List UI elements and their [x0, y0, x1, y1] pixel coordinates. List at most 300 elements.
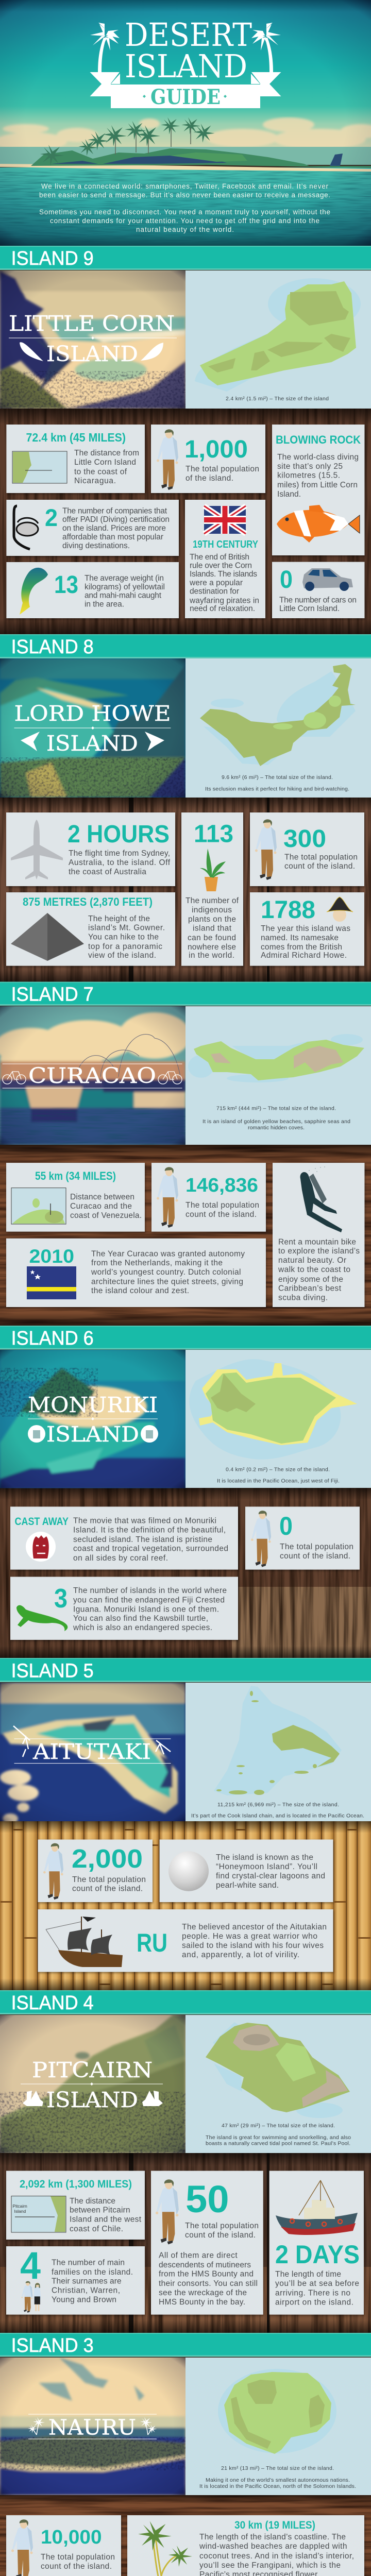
- text block: Caribbean’s best: [278, 1284, 342, 1293]
- caption: [203, 1106, 350, 1131]
- text block: The end of British: [190, 553, 249, 562]
- text block: The island is known as the: [216, 1853, 313, 1862]
- text block: The total population: [72, 1875, 146, 1884]
- card: Ru: RU: [137, 1928, 167, 1957]
- title: Monuriki Island: ISLAND: [46, 1422, 139, 1447]
- text block: [69, 849, 171, 876]
- card: Ru: [38, 1909, 333, 1972]
- text block: [72, 1875, 146, 1893]
- text block: affordable than most popular: [62, 533, 163, 541]
- mini map: Island: [14, 2209, 26, 2214]
- map: Little Corn Island: [185, 270, 371, 409]
- map: Lord Howe Island: [185, 658, 371, 798]
- text block: Island and the west: [70, 2215, 142, 2224]
- photo: Aitutaki: [0, 1683, 185, 1821]
- text block: Little Corn Island.: [279, 604, 340, 613]
- card: population 50: 50: [185, 2178, 229, 2221]
- text block: The total population: [185, 1201, 259, 1210]
- photo: Monuriki: [0, 1350, 185, 1488]
- card: population 300: [250, 812, 364, 886]
- card: 19th century: [185, 500, 265, 618]
- card: 875 metres: 875 METRES (2,870 FEET): [23, 895, 153, 908]
- icon: scuba diver: [300, 1166, 342, 1232]
- card: 1788: 1788: [261, 896, 315, 924]
- title: Monuriki Island: MONURIKI: [28, 1393, 158, 1417]
- caption: boasts a naturally carved tidal pool named St. Paul’s Pool.: [206, 2141, 350, 2147]
- icon: palm trees: [138, 2521, 192, 2576]
- text block: scuba diving.: [278, 1293, 328, 1302]
- icon: person: [157, 1167, 178, 1228]
- map: Curacao: [185, 1006, 371, 1145]
- title: Nauru: [28, 2414, 157, 2440]
- caption: 0.4 km² (0.2 mi²) – The size of the island.: [226, 1467, 330, 1473]
- hero panel: island photo: [0, 0, 371, 246]
- text block: arriving. There is no: [275, 2289, 350, 2298]
- icon: person: [255, 819, 277, 880]
- title: Aitutaki: [13, 1726, 171, 1764]
- text block: The number of companies that: [62, 506, 167, 515]
- text block: see the wreckage of the: [159, 2289, 247, 2297]
- card: population 300: 300: [283, 825, 326, 853]
- text block: The length of the island’s coastline. The: [199, 2533, 346, 2541]
- text block: The length of time: [275, 2270, 341, 2279]
- card: population 0: 0: [279, 1512, 293, 1540]
- card: zero cars: 0: [280, 566, 293, 594]
- card: 2010: [6, 1239, 266, 1307]
- mini map: [12, 451, 67, 483]
- text block: The Year Curacao was granted autonomy: [91, 1250, 245, 1258]
- text block: enjoy some of the: [278, 1275, 343, 1284]
- intro text: natural beauty of the world.: [136, 226, 234, 233]
- card: yellowtail weight: [6, 562, 179, 618]
- text block: [70, 1193, 142, 1220]
- caption: Making it one of the world’s smallest autonomous nations.: [206, 2477, 350, 2483]
- card: population 10,000: [6, 2515, 121, 2576]
- text block: count of the island.: [185, 1210, 257, 1219]
- text block: Distance between: [70, 1193, 134, 1201]
- title: Little Corn Island: ISLAND: [46, 342, 138, 366]
- text block: [280, 1543, 353, 1561]
- text block: [185, 896, 239, 960]
- caption: It is an island of golden yellow beaches, sapphire seas and: [203, 1118, 350, 1125]
- text block: in the area.: [85, 600, 124, 609]
- band: Island 5: [0, 1658, 371, 1682]
- icon: sailing ship: [46, 1917, 123, 1967]
- heading: DESERT: DESERT: [125, 16, 252, 54]
- mini map: [11, 1188, 66, 1224]
- band: Island 9: [0, 246, 371, 270]
- text block: [199, 2533, 354, 2576]
- icon: UK flag: [204, 506, 246, 534]
- icon: mahi-mahi: [20, 568, 48, 615]
- text block: The distance: [70, 2197, 115, 2206]
- text block: Rent a mountain bike: [278, 1238, 356, 1247]
- icon: right palm and ribbon tail: [251, 23, 281, 96]
- icon: couple: [21, 2281, 41, 2313]
- text block: Their surnames are: [52, 2277, 122, 2285]
- card: 19th century: 19TH CENTURY: [193, 539, 259, 550]
- text block: kilometres (15.5.: [277, 471, 340, 480]
- band: Island 9: ISLAND 9: [11, 248, 94, 269]
- card: PADI diving: [6, 500, 179, 556]
- text block: [52, 2259, 133, 2304]
- intro text: We live in a connected world: smartphones, Twitter, Facebook and email. It’s never: [41, 182, 328, 190]
- text block: their consorts. You can still: [159, 2279, 258, 2288]
- text block: can be found: [188, 934, 236, 942]
- text block: count of the island.: [284, 862, 355, 871]
- text block: [261, 924, 350, 960]
- text block: miles) from Little Corn: [277, 481, 358, 489]
- card: four families: [6, 2244, 145, 2315]
- band: Island 3: ISLAND 3: [11, 2335, 94, 2357]
- band: Island 6: ISLAND 6: [11, 1328, 94, 1349]
- text block: on all sides by coral reef.: [73, 1554, 168, 1563]
- text block: kilograms) of yellowtail: [85, 583, 165, 591]
- text block: and mahi-mahi caught: [85, 591, 162, 600]
- text block: [73, 1586, 227, 1632]
- band: Island 7: [0, 982, 371, 1006]
- text block: [185, 465, 259, 483]
- band: Island 3: [0, 2333, 371, 2357]
- text block: The world-class diving: [277, 453, 359, 462]
- photo: Little Corn Island: [0, 270, 185, 409]
- icon: bicycles: [3, 1072, 182, 1084]
- icon: left palm and ribbon tail: [90, 23, 120, 96]
- card: population 146,836: [151, 1163, 266, 1232]
- wood background: island 6: [0, 1488, 371, 1658]
- card: two days at sea: 2 DAYS: [275, 2240, 360, 2269]
- icon: Wilson: [26, 1532, 56, 1562]
- icon: person: [43, 1843, 63, 1900]
- icon: pyramid: [11, 913, 84, 961]
- card: population 2,000: 2,000: [72, 1844, 143, 1873]
- text block: descendents of mutineers: [159, 2261, 251, 2269]
- icon: corn leaves: [20, 342, 163, 361]
- text block: and, apparently, a lot of virility.: [182, 1951, 299, 1959]
- text block: The number of cars on: [279, 596, 357, 605]
- text block: rule over the Corn: [190, 562, 252, 570]
- caption: 715 km² (444 mi²) – The total size of the island.: [216, 1106, 336, 1112]
- text block: to the coast of: [74, 468, 127, 476]
- caption: 9.6 km² (6 mi²) – The total size of the island.: [222, 774, 333, 781]
- icon: fishing boat: [276, 2180, 358, 2235]
- text block: Admiral Richard Howe.: [261, 951, 347, 960]
- icon: person: [157, 429, 178, 490]
- title: Lord Howe Island: ISLAND: [46, 731, 138, 756]
- text block: people. He was a great warrior who: [182, 1932, 317, 1941]
- text block: [85, 574, 165, 609]
- icon: tall ships: [23, 2091, 163, 2106]
- title: Little Corn Island: [9, 311, 177, 366]
- card: population 2,000: [38, 1839, 153, 1902]
- card: population 1,000: [151, 425, 265, 493]
- text block: indigenous: [192, 906, 232, 914]
- text block: find crystal-clear lagoons and: [216, 1872, 325, 1880]
- band: Island 4: ISLAND 4: [11, 1992, 94, 2014]
- icon: person: [251, 1511, 271, 1567]
- icon: clownfish: [277, 505, 360, 543]
- text block: Islands. The islands: [190, 570, 257, 579]
- logo: Desert Island Guide: [90, 16, 281, 109]
- icon: plane: [11, 820, 63, 879]
- card: coastline: 30 km (19 MILES): [234, 2519, 315, 2531]
- text block: named. Its namesake: [261, 934, 339, 942]
- text block: The movie that was filmed on Monuriki: [73, 1517, 216, 1525]
- text block: [88, 914, 165, 960]
- text block: [279, 596, 357, 613]
- text block: in the world.: [189, 951, 234, 960]
- text block: The number of: [185, 896, 239, 905]
- photo: Nauru: [0, 2358, 185, 2495]
- text block: to explore the island’s: [278, 1247, 360, 1256]
- band: Island 4: [0, 1990, 371, 2014]
- text block: sailed to the island with his four wives: [182, 1941, 324, 1950]
- caption: [205, 774, 349, 792]
- text block: pearl-white sand.: [216, 1881, 279, 1890]
- text block: you’ll be at sea before: [275, 2279, 359, 2288]
- icon: warriors: [13, 1726, 171, 1757]
- card: coastline: [127, 2515, 364, 2576]
- text block: The total population: [185, 465, 259, 473]
- text block: were a popular: [189, 579, 243, 587]
- title: Lord Howe Island: LORD HOWE: [14, 701, 171, 726]
- text block: [185, 1201, 259, 1219]
- ribbon: GUIDE: GUIDE: [150, 85, 221, 109]
- intro text: [39, 182, 330, 233]
- title: Pitcairn Island: PITCAIRN: [32, 2058, 153, 2082]
- card: 55 km: [6, 1163, 145, 1232]
- card: population 1,000: 1,000: [184, 436, 248, 463]
- text block: [91, 1250, 245, 1295]
- text block: [275, 2270, 359, 2307]
- text block: destination for: [190, 587, 239, 596]
- text block: the island colour and zest.: [91, 1286, 189, 1295]
- card: distance to Nicaragua: [6, 425, 145, 493]
- text block: the coast of Australia: [69, 868, 146, 876]
- text block: “Honeymoon Island”. You’ll: [216, 1862, 317, 1871]
- map: Monuriki: [185, 1350, 371, 1488]
- text block: which is also an endangered species.: [73, 1623, 212, 1632]
- card: 875 metres: [6, 892, 175, 966]
- card: scuba: [273, 1163, 365, 1307]
- text block: You can also find the Kawsbill turtle,: [73, 1614, 208, 1623]
- band: Island 6: [0, 1326, 371, 1350]
- text block: diving destinations.: [62, 541, 130, 550]
- text block: The number of main: [52, 2259, 125, 2267]
- title: Pitcairn Island: [21, 2058, 163, 2112]
- text block: wayfaring pirates in: [189, 597, 259, 605]
- icon: iguana: [16, 1605, 68, 1631]
- icon: car: [302, 568, 353, 591]
- text block: top for a panoramic: [88, 942, 162, 951]
- text block: nowhere else: [188, 943, 236, 952]
- card: distance to Nicaragua: 72.4 km (45 MILES): [26, 431, 126, 444]
- caption: 11,215 km² (6,969 mi²) – The size of the island.: [217, 1802, 339, 1808]
- text block: you’ll see the Frangipani, which is the: [199, 2561, 341, 2570]
- text block: The year this island was: [261, 924, 350, 933]
- card: 55 km: 55 km (34 MILES): [35, 1170, 116, 1182]
- text block: The total population: [284, 853, 358, 862]
- text block: Curacao and the: [70, 1202, 132, 1211]
- card: zero cars: [272, 562, 365, 618]
- text block: [189, 553, 259, 613]
- caption: [206, 2123, 351, 2147]
- icon: Curacao flag: [27, 1266, 76, 1299]
- wood background: island 3: [0, 2495, 371, 2576]
- text block: Iguana. Monuriki Island is one of them.: [73, 1605, 219, 1614]
- card: population 146,836: 146,836: [185, 1175, 258, 1196]
- mini map: [11, 2196, 66, 2232]
- title: Pitcairn Island: ISLAND: [46, 2088, 138, 2112]
- text block: secluded island. The island is pristine: [73, 1535, 212, 1544]
- text block: [278, 1238, 360, 1302]
- intro text: Sometimes you need to disconnect. You need a moment truly to yourself, without the: [39, 208, 330, 216]
- text block: [62, 506, 170, 550]
- caption: It is located in the Pacific Ocean, north of the Solomon Islands.: [199, 2483, 356, 2489]
- text block: [216, 1853, 325, 1890]
- text block: HMS Bounty in the bay.: [159, 2298, 245, 2307]
- card: 2,092 km: [6, 2171, 145, 2240]
- text block: The number of islands in the world where: [73, 1586, 227, 1595]
- text block: coast of Venezuela.: [70, 1211, 142, 1220]
- wood background: island 9: [0, 409, 371, 634]
- card: 2 hours: [6, 812, 175, 886]
- map: Nauru: [185, 2358, 371, 2495]
- card: Cast Away: CAST AWAY: [14, 1516, 69, 1528]
- card: 1788: [250, 892, 364, 966]
- card: Blowing Rock: BLOWING ROCK: [276, 433, 361, 446]
- text block: The average weight (in: [85, 574, 164, 583]
- icon: person: [156, 2179, 179, 2244]
- photo: Pitcairn: [0, 2015, 185, 2153]
- intro text: been easier to send a message. But it’s also never been easier to receive a message.: [39, 191, 330, 199]
- band: Island 8: [0, 634, 371, 658]
- text block: Australia, to the island. Off: [69, 858, 171, 867]
- text block: Island. It is the definition of the beautiful,: [73, 1526, 226, 1535]
- text block: coconut trees. And in the island’s interior,: [199, 2552, 354, 2561]
- text block: need of relaxation.: [190, 604, 255, 613]
- text block: [182, 1923, 327, 1959]
- text block: Christian, Warren,: [52, 2286, 120, 2295]
- band: Island 7: ISLAND 7: [11, 984, 94, 1006]
- photo: Lord Howe Island: [0, 658, 185, 798]
- text block: You can hike to the: [88, 933, 159, 942]
- text block: [73, 1517, 228, 1563]
- text block: coast of Chile.: [70, 2225, 123, 2233]
- text block: natural beauty. Or: [278, 1256, 346, 1265]
- text block: [70, 2197, 142, 2233]
- caption: 2.4 km² (1.5 mi²) – The size of the island: [226, 396, 329, 402]
- text block: count of the island.: [41, 2562, 112, 2571]
- card: iguana: [10, 1577, 238, 1640]
- text block: view of the island.: [88, 951, 156, 960]
- mini map: Pitcairn: [12, 2204, 27, 2209]
- card: 2 hours: 2 HOURS: [68, 821, 170, 848]
- card: population 50: [151, 2171, 263, 2315]
- text block: The flight time from Sydney,: [69, 849, 170, 858]
- text block: offer PADI (Diving) certification: [62, 515, 170, 524]
- text block: site that’s only 25: [277, 462, 343, 471]
- caption: It is located in the Pacific Ocean, just west of Fiji.: [217, 1478, 340, 1484]
- text block: count of the island.: [280, 1552, 350, 1561]
- caption: [217, 1467, 340, 1484]
- card: 113 plants: [181, 812, 243, 966]
- caption: [199, 2465, 356, 2489]
- text block: island that: [193, 924, 232, 933]
- icon: snorkel: [14, 506, 38, 549]
- text block: walk to the coast to: [278, 1265, 350, 1274]
- text block: count of the island.: [72, 1885, 143, 1893]
- text block: of the island.: [185, 474, 233, 483]
- title: Nauru: NAURU: [48, 2415, 136, 2440]
- text block: world’s youngest country. Dutch colonial: [91, 1268, 241, 1277]
- text block: The total population: [280, 1543, 353, 1551]
- text block: comes from the British: [261, 943, 342, 952]
- card: Honeymoon Island: [160, 1839, 333, 1902]
- title: Curacao: CURACAO: [28, 1063, 156, 1088]
- text block: airport on the island.: [275, 2298, 353, 2307]
- icon: pearl: [168, 1851, 209, 1891]
- bamboo background: island 5: [0, 1821, 371, 1990]
- text block: Young and Brown: [52, 2296, 116, 2304]
- caption: 47 km² (29 mi²) – The total size of the island.: [222, 2123, 335, 2129]
- text block: [284, 853, 358, 871]
- card: yellowtail weight: 13: [54, 571, 78, 599]
- icon: palms: [28, 2417, 157, 2435]
- text block: you can find the endangered Fiji Crested: [73, 1596, 225, 1605]
- text block: from the HMS Bounty and: [159, 2270, 254, 2279]
- text block: The believed ancestor of the Aitutakian: [182, 1923, 327, 1931]
- text block: families on the island.: [52, 2268, 133, 2277]
- title: Little Corn Island: LITTLE CORN: [9, 311, 175, 336]
- band: Island 8: ISLAND 8: [11, 636, 94, 658]
- text block: Little Corn Island: [74, 458, 136, 467]
- wood background: island 7: [0, 1145, 371, 1326]
- text block: [74, 449, 139, 485]
- card: iguana: 3: [54, 1584, 68, 1614]
- text block: from the Netherlands, making it the: [91, 1259, 223, 1267]
- text block: [41, 2553, 115, 2571]
- text block: The total population: [41, 2553, 115, 2562]
- icon: birds: [21, 732, 164, 751]
- caption: [191, 1802, 364, 1819]
- text block: plants on the: [188, 915, 236, 924]
- text block: All of them are direct: [159, 2251, 238, 2260]
- text block: The height of the: [88, 914, 150, 923]
- text block: Nicaragua.: [74, 477, 116, 485]
- ribbon: GUIDE: [111, 84, 260, 109]
- text block: island’s Mt. Gowner.: [88, 923, 165, 932]
- card: PADI diving: 2: [45, 504, 58, 531]
- text block: [159, 2222, 259, 2307]
- card: four families: 4: [20, 2244, 41, 2287]
- title: Lord Howe Island: [14, 701, 171, 756]
- card: 2,092 km: 2,092 km (1,300 MILES): [20, 2178, 132, 2190]
- photo: Curacao: [0, 1006, 185, 1145]
- text block: The distance from: [74, 449, 139, 457]
- intro text: constant demands for your attention. You need to get off the grid and into the: [50, 217, 319, 225]
- icon: potted plant: [200, 849, 226, 891]
- caption: romantic hidden coves.: [248, 1125, 305, 1131]
- title: Curacao: [3, 1063, 182, 1088]
- map: Pitcairn: [185, 2015, 371, 2153]
- card: Blowing Rock: [272, 425, 365, 555]
- card: 113 plants: 113: [194, 821, 233, 848]
- heading: ISLAND: ISLAND: [125, 47, 247, 85]
- card: two days at sea: [269, 2171, 364, 2315]
- text block: between Pitcairn: [70, 2206, 130, 2214]
- text block: Island.: [277, 490, 301, 499]
